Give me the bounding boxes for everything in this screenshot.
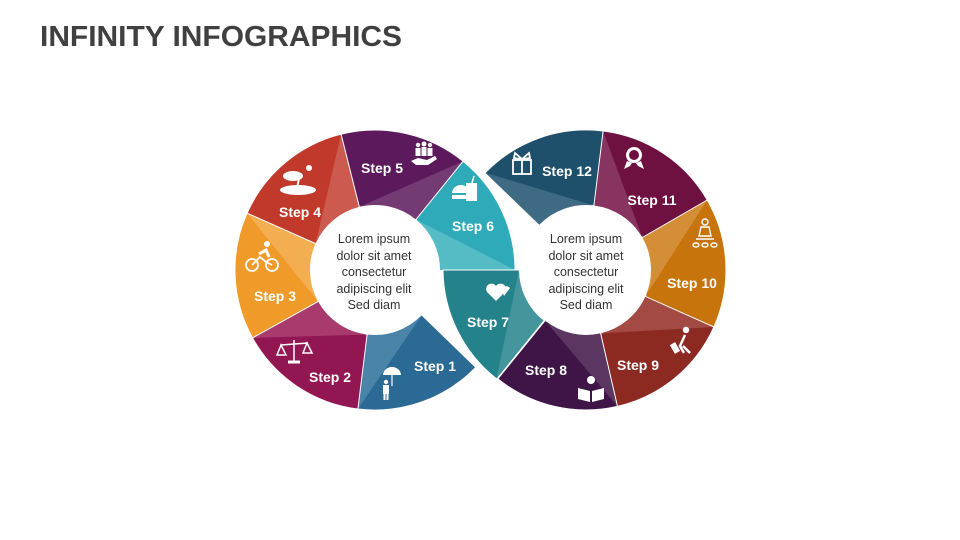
center text: left: Lorem ipsum bbox=[338, 232, 410, 246]
segment: step 8 bbox=[498, 320, 618, 410]
step labels: Step 12 bbox=[542, 163, 592, 179]
center text: left: Sed diam bbox=[348, 298, 400, 312]
icon: scales bbox=[277, 340, 312, 362]
segment: step 6 bbox=[416, 161, 515, 270]
segment: step 5 bbox=[341, 130, 463, 220]
center text: left: dolor sit amet bbox=[336, 249, 412, 263]
icon: cyclist bbox=[246, 241, 278, 271]
step labels: Step 9 bbox=[617, 357, 659, 373]
center text: right: dolor sit amet bbox=[548, 249, 624, 263]
center text: right: Lorem ipsum bbox=[550, 232, 622, 246]
step labels bbox=[254, 160, 717, 385]
center text: right: consectetur bbox=[554, 265, 618, 279]
segment: step 12 bbox=[485, 130, 603, 225]
icon: traveler bbox=[670, 327, 690, 354]
step labels: Step 2 bbox=[309, 369, 351, 385]
step labels: Step 1 bbox=[414, 358, 456, 374]
icon: award badge bbox=[624, 147, 644, 169]
segment: step 11 bbox=[594, 131, 707, 238]
step labels: Step 6 bbox=[452, 218, 494, 234]
center text: right bbox=[548, 232, 624, 312]
title: INFINITY INFOGRAPHICS bbox=[40, 21, 402, 53]
segment: step 2 bbox=[252, 302, 367, 409]
segment: step 3 bbox=[235, 213, 318, 338]
icon: beach island bbox=[280, 165, 316, 195]
center text: left: adipiscing elit bbox=[336, 282, 412, 296]
icon: gift box bbox=[513, 153, 531, 174]
center text: left: consectetur bbox=[342, 265, 406, 279]
icon: meditation bbox=[693, 219, 717, 247]
segment: step 9 bbox=[601, 296, 714, 406]
step labels: Step 10 bbox=[667, 275, 717, 291]
step labels: Step 11 bbox=[627, 192, 677, 208]
center text: right: adipiscing elit bbox=[548, 282, 624, 296]
step labels: Step 7 bbox=[467, 314, 509, 330]
step labels: Step 3 bbox=[254, 288, 296, 304]
segment: step 10 bbox=[642, 200, 726, 327]
center text: left bbox=[336, 232, 412, 312]
icon: burger and drink bbox=[452, 176, 477, 201]
center text: right: Sed diam bbox=[560, 298, 612, 312]
step labels: Step 4 bbox=[279, 204, 321, 220]
icon: hand with people bbox=[411, 142, 437, 165]
icon: umbrella person bbox=[383, 367, 401, 400]
step labels: Step 5 bbox=[361, 160, 403, 176]
segment: step 1 bbox=[358, 315, 476, 410]
step labels: Step 8 bbox=[525, 362, 567, 378]
icon: hearts bbox=[486, 284, 510, 301]
icon: reading person bbox=[578, 376, 604, 402]
segment: step 4 bbox=[247, 134, 359, 244]
segment: step 7 bbox=[443, 270, 544, 379]
